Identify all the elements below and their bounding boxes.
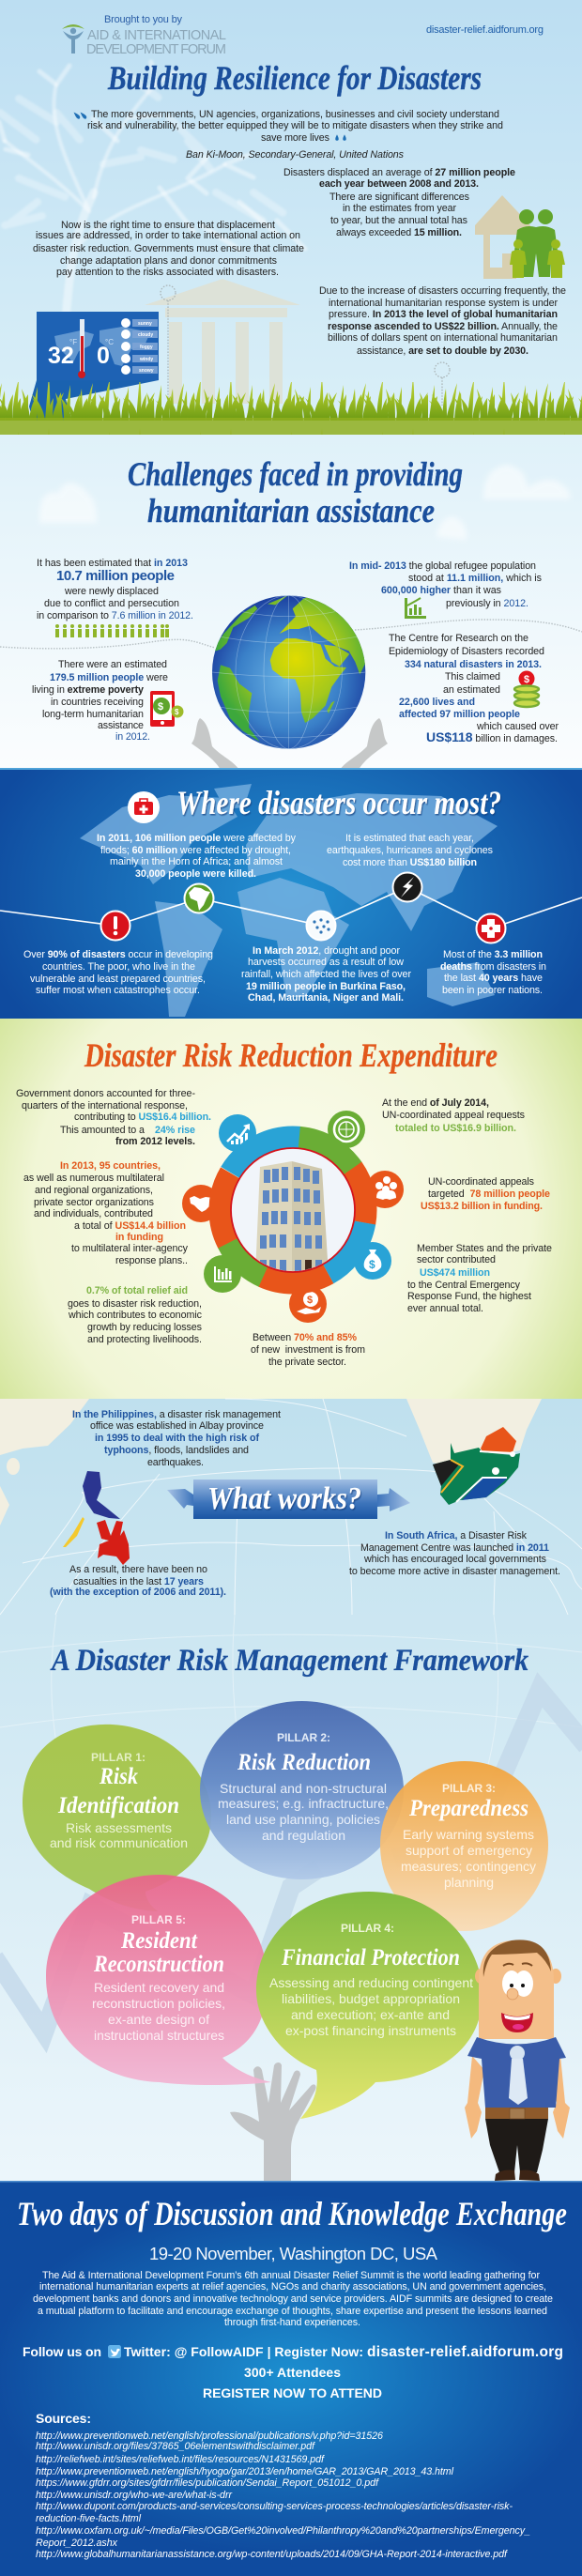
sources: http://www.globalhumanitarianassistance.org/wp-content/uploads/2014/09/GHA-Report-2014-interactive.pdf	[36, 2549, 508, 2560]
bubble: pillar 4: ex-post financing instruments	[285, 2023, 456, 2038]
text: member states: ever annual total.	[407, 1303, 483, 1314]
icon: twitter	[108, 2345, 121, 2358]
quote: Ban Ki-Moon, Secondary-General, United Nations	[186, 149, 405, 161]
description	[33, 2270, 553, 2328]
bubble: pillar 2: land use planning, policies	[226, 1812, 380, 1827]
text: extreme poverty: living in extreme poverty	[32, 684, 144, 696]
heading	[128, 455, 463, 529]
bubble: pillar 2: Structural and non-structural	[220, 1781, 387, 1796]
weather panel with thermometer: foggy	[140, 345, 153, 350]
text: 95 countries: in funding	[115, 1232, 163, 1243]
text: cost of earthquakes: cost more than US$180 billion	[343, 857, 477, 868]
logo: Aid & International Development Forum	[62, 24, 226, 57]
bubble: pillar 4: Assessing and reducing contingent	[269, 1975, 473, 1990]
panel: where disasters occur most	[0, 768, 582, 1019]
text: member states	[407, 1243, 552, 1314]
text: newly displaced	[37, 558, 193, 621]
text: developing countries: suffer most when catastrophes occur.	[36, 985, 200, 996]
text: extreme poverty: in 2012.	[115, 731, 150, 743]
text: appeal requests: totaled to US$16.9 billion.	[395, 1123, 516, 1134]
text: natural disasters: which caused over	[476, 721, 559, 732]
faint tree background	[0, 62, 305, 319]
sources: http://www.preventionweb.net/english/hyogo/gar/2013/en/home/GAR_2013/GAR_2013_43.html	[36, 2466, 454, 2477]
text: extreme poverty: assistance	[98, 720, 144, 731]
text: relief aid share: growth by reducing losses	[87, 1322, 202, 1333]
icon: Africa	[184, 884, 214, 912]
text: relief aid share: and protecting livelihoods.	[87, 1334, 202, 1345]
heading: Where disasters occur most?	[176, 784, 501, 821]
text: natural disasters: affected 97 million people	[399, 709, 520, 720]
text: Philippines result: (with the exception of 2006 and 2011).	[50, 1587, 226, 1598]
clouds	[39, 465, 570, 540]
text: relief aid share: goes to disaster risk reduction,	[68, 1298, 202, 1310]
text: Philippines: In the Philippines, a disaster risk management	[72, 1409, 281, 1420]
text: private sector investment	[251, 1332, 365, 1368]
bubble: pillar 3	[380, 1761, 548, 1931]
text: Philippines result	[50, 1564, 226, 1598]
text: deaths in poorer nations: the last 40 years have	[444, 973, 543, 984]
icon: money bag: $	[369, 1258, 375, 1271]
text: newly displaced: It has been estimated that in 2013	[37, 558, 188, 569]
bubble: pillar 4	[256, 1892, 482, 2119]
brought to you by: Brought to you by	[104, 14, 182, 25]
text: appeals targeted: UN-coordinated appeals	[428, 1176, 534, 1188]
bubble: pillar 5: PILLAR 5:	[131, 1913, 186, 1926]
text: displaced people: There are significant differences	[329, 192, 469, 203]
heading: Challenges faced in providing	[128, 455, 463, 493]
text: humanitarian response: international humanitarian response system is under	[329, 298, 558, 309]
icon: hand with dollar	[289, 1285, 327, 1323]
icon: Philippines map	[63, 1471, 130, 1565]
panel: two days of discussion	[0, 2181, 582, 2576]
text: natural disasters: an estimated	[443, 684, 500, 696]
text: government donors: Government donors accounted for three-	[16, 1088, 195, 1099]
text: right time: issues are addressed, in order to take international action on	[36, 230, 300, 241]
text: government donors: contributing to US$16.4 billion.	[74, 1112, 211, 1123]
text: refugee population: 600,000 higher than it was	[381, 585, 501, 596]
icon: hand with dollar: $	[307, 1295, 313, 1306]
dashed wave dividers	[0, 620, 582, 649]
icon: money bag	[354, 1242, 391, 1280]
sources	[36, 2411, 530, 2560]
icon: coin stack	[514, 670, 539, 707]
text: natural disasters: 334 natural disasters in 2013.	[405, 659, 542, 670]
text: floods and drought: In 2011, 106 million people were affected by	[97, 833, 297, 844]
icon: phone with dollar coins	[150, 691, 184, 727]
weather panel with thermometer: °C	[105, 338, 114, 346]
text: March 2012 drought: rainfall, which affected the lives of over	[241, 969, 411, 980]
bubble: pillar 3: support of emergency	[406, 1843, 532, 1858]
text: natural disasters: 22,600 lives and	[399, 697, 475, 708]
heading: humanitarian assistance	[147, 492, 435, 529]
text: Philippines: typhoons, floods, landslides and	[104, 1445, 249, 1456]
text: appeals targeted	[421, 1176, 550, 1212]
text: developing countries: countries. The poor, who live in the	[42, 961, 195, 973]
text: extreme poverty: 179.5 million people were	[50, 672, 168, 683]
text: displaced people	[283, 167, 515, 238]
weather panel with thermometer: sunny	[138, 321, 152, 327]
weather panel with thermometer: 0	[97, 343, 110, 369]
icon: South Africa flag map	[433, 1427, 520, 1505]
description: through first-hand experiences.	[224, 2317, 360, 2328]
sources: Report_2012.ashx	[36, 2538, 118, 2549]
bubble: pillar 5: Reconstruction	[93, 1952, 224, 1977]
sources: http://www.unisdr.org/who-we-are/what-is-drr	[36, 2490, 232, 2501]
text: 95 countries: response plans..	[115, 1255, 188, 1266]
bubble: pillar 4: PILLAR 4:	[341, 1922, 394, 1935]
bubble: pillar 1: and risk communication	[50, 1835, 188, 1850]
text: deaths in poorer nations: been in poorer nations.	[442, 985, 543, 996]
social and registration: Twitter: @ FollowAIDF | Register Now:	[124, 2344, 363, 2359]
text: government donors: 24% rise	[155, 1125, 195, 1136]
text: floods and drought: 30,000 people were killed.	[135, 868, 256, 880]
bubble: pillar 2: PILLAR 2:	[277, 1731, 330, 1744]
character: smiling man	[465, 1940, 570, 2181]
text: 95 countries: private sector organizations	[34, 1197, 154, 1208]
icon: handshake	[182, 1185, 220, 1222]
icon: rain drops	[306, 911, 336, 941]
text: South Africa: which has encouraged local governments	[363, 1554, 546, 1565]
text: March 2012 drought: Chad, Mauritania, Niger and Mali.	[248, 992, 404, 1004]
text: deaths in poorer nations: Most of the 3.3 million	[443, 949, 543, 960]
text: appeal requests	[382, 1097, 525, 1134]
text: floods and drought	[97, 833, 297, 880]
bubble: pillar 5: instructional structures	[94, 2028, 224, 2043]
text: relief aid share	[68, 1285, 203, 1345]
bubble: pillar 5: Resident	[120, 1928, 198, 1954]
text: natural disasters: US$118 billion in damages.	[426, 729, 558, 744]
text: Philippines	[72, 1409, 281, 1468]
bubble: pillar 3: measures; contingency	[401, 1859, 536, 1874]
text: right time: Now is the right time to ensure that displacement	[61, 220, 275, 231]
date and place: 19-20 November, Washington DC, USA	[149, 2244, 438, 2263]
weather panel with thermometer	[29, 312, 159, 421]
sources: reduction-five-facts.html	[36, 2513, 142, 2524]
text: displaced people: always exceeded 15 million.	[336, 227, 462, 238]
text: right time: change adaptation plans and donor commitments	[60, 255, 277, 267]
weather panel with thermometer: windy	[139, 357, 153, 362]
icon: hands holding globe	[191, 718, 388, 770]
text: newly displaced: in comparison to 7.6 million in 2012.	[37, 610, 193, 621]
text: newly displaced: were newly displaced	[64, 586, 159, 597]
bubble: pillar 3: PILLAR 3:	[442, 1782, 496, 1795]
icon: UN emblem	[328, 1111, 365, 1148]
description: international humanitarian experts at relief agencies, NGOs and charity associations, UN and government agencies,	[39, 2281, 546, 2292]
text: government donors	[16, 1088, 211, 1147]
bubble: pillar 4: and execution; ex-ante and	[291, 2007, 450, 2022]
text: right time: pay attention to the risks associated with disasters.	[56, 267, 279, 278]
text: cost of earthquakes: earthquakes, hurricanes and cyclones	[327, 845, 493, 856]
map background	[0, 1399, 582, 1784]
social and registration	[23, 2344, 563, 2400]
text: 95 countries: and regional organizations,	[35, 1185, 153, 1196]
text: government donors: This amounted to a	[60, 1125, 145, 1136]
sources: http://www.preventionweb.net/english/professional/publications/v.php?id=31526	[36, 2430, 383, 2442]
quote: risk and vulnerability, the better equipped they will be to mitigate disasters when they strike and	[87, 120, 503, 131]
timeline line	[0, 887, 582, 928]
bubble: pillar 1: Risk assessments	[66, 1820, 172, 1835]
text: 95 countries: a total of US$14.4 billion	[74, 1220, 186, 1232]
weather panel with thermometer: °F	[69, 338, 77, 346]
world map background	[80, 784, 498, 1017]
text: extreme poverty: in countries receiving	[51, 697, 144, 708]
text: right time	[33, 220, 304, 278]
text: humanitarian response: pressure. In 2013 the level of global humanitarian	[329, 309, 558, 320]
text: Philippines: office was established in Albay province	[90, 1420, 264, 1432]
text: deaths in poorer nations	[440, 949, 546, 996]
dashed balloon markers	[161, 285, 450, 406]
icon: first aid kit	[128, 791, 160, 823]
icon: pale government building	[145, 279, 300, 404]
text: newly displaced: due to conflict and persecution	[44, 598, 179, 609]
ring segments	[191, 1109, 394, 1311]
panel: lower background	[0, 1399, 582, 2181]
sources: https://www.gfdrr.org/sites/gfdrr/files/publication/Sendai_Report_051012_0.pdf	[36, 2477, 379, 2489]
text: developing countries: Over 90% of disasters occur in developing	[23, 949, 213, 960]
icon: medical cross	[477, 914, 505, 943]
icon: lightning	[392, 873, 422, 901]
text: Philippines: in 1995 to deal with the high risk of	[95, 1433, 259, 1444]
text: appeals targeted: targeted 78 million people	[428, 1188, 550, 1200]
bubble: pillar 1: Identification	[57, 1793, 179, 1818]
text: refugee population: In mid- 2013 the global refugee population	[349, 560, 536, 572]
text: South Africa	[349, 1530, 560, 1577]
bubble: pillar 4: liabilities, budget appropriation	[282, 1991, 460, 2006]
bubble: pillar 1	[23, 1725, 211, 1911]
bubble: pillar 1: PILLAR 1:	[91, 1751, 146, 1764]
text: refugee population	[349, 560, 542, 609]
text: extreme poverty	[32, 659, 168, 743]
weather panel with thermometer: 32	[48, 343, 74, 369]
text: private sector investment: Between 70% and 85%	[253, 1332, 357, 1343]
ring diagram	[182, 1109, 404, 1323]
text: government donors: from 2012 levels.	[115, 1136, 195, 1147]
text: humanitarian response	[319, 285, 566, 357]
heading: A Disaster Risk Management Framework	[50, 1644, 528, 1678]
text: humanitarian response: Due to the increase of disasters occurring frequently, the	[319, 285, 566, 297]
panel: building resilience introduction	[0, 0, 582, 441]
globe	[211, 593, 368, 749]
sources: http://www.unisdr.org/files/37865_06elementswithdisclaimer.pdf	[36, 2441, 315, 2452]
quote	[75, 109, 503, 161]
social and registration: 300+ Attendees	[244, 2365, 341, 2380]
grass	[0, 382, 582, 435]
text: 95 countries: as well as numerous multilateral	[23, 1173, 164, 1184]
bubble: pillar 2: measures; e.g. infractructure,	[218, 1796, 389, 1811]
text: South Africa: In South Africa, a Disaster Risk	[385, 1530, 528, 1541]
icon: warning	[101, 911, 130, 941]
description: development banks and donors and innovative technology and service providers. AIDF summits are designed to create	[33, 2293, 553, 2305]
quote: save more lives	[261, 132, 329, 144]
bubble: pillar 3: planning	[444, 1875, 494, 1890]
social and registration: Follow us on	[23, 2344, 101, 2359]
text: appeal requests: UN-coordinated appeal requests	[382, 1110, 525, 1121]
text: floods and drought: floods; 60 million were affected by drought,	[100, 845, 291, 856]
icon: rising chart	[219, 1114, 256, 1152]
text: displaced people: Disasters displaced an average of 27 million people	[283, 167, 515, 178]
text: private sector investment: of new investment is from	[251, 1344, 365, 1356]
icon: grey raised hand	[230, 2062, 316, 2181]
bubble: pillar 5: reconstruction policies,	[92, 1996, 225, 2011]
text: humanitarian response: assistance, are set to double by 2030.	[357, 345, 528, 357]
text: Philippines result: casualties in the last 17 years	[73, 1576, 204, 1587]
icon: row of people	[55, 624, 169, 637]
weather panel with thermometer: cloudy	[138, 332, 153, 338]
bubble: pillar 2	[200, 1701, 404, 1879]
bubble: pillar 1: Risk	[99, 1764, 138, 1789]
text: March 2012 drought: 19 million people in Burkina Faso,	[246, 981, 406, 992]
bubble: pillar 5	[46, 1875, 271, 2085]
social and registration: REGISTER NOW TO ATTEND	[203, 2385, 382, 2400]
text: relief aid share: 0.7% of total relief aid	[86, 1285, 188, 1296]
text: displaced people: in the estimates from year	[343, 203, 456, 214]
text: private sector investment: the private sector.	[268, 1357, 346, 1368]
bubble: pillar 3: Preparedness	[408, 1796, 528, 1821]
text: March 2012 drought: In March 2012, drought and poor	[253, 945, 400, 957]
text: displaced people: to year, but the annual total has	[330, 215, 467, 226]
quote: The more governments, UN agencies, organizations, businesses and civil society understand	[91, 109, 499, 120]
text: member states: Member States and the private	[417, 1243, 552, 1254]
text: displaced people: each year between 2008 and 2013.	[319, 178, 479, 190]
banner: what works	[167, 1480, 410, 1519]
text: 95 countries: and individuals, contributed	[34, 1208, 153, 1219]
text: right time: disaster risk reduction. Governments must ensure that climate	[33, 243, 304, 254]
text: natural disasters	[389, 633, 559, 744]
title: Building Resilience for Disasters	[107, 59, 482, 97]
bubble: pillar 5: Resident recovery and	[94, 1980, 224, 1995]
sources: http://www.dupont.com/products-and-services/consulting-services-process-technologies/articles/disaster-risk-	[36, 2501, 513, 2512]
sources: http://reliefweb.int/sites/reliefweb.int/files/resources/N1431569.pdf	[36, 2454, 325, 2465]
text: developing countries: vulnerable and least prepared countries,	[30, 974, 206, 985]
text: refugee population: previously in 2012.	[446, 598, 528, 609]
panel: disaster risk reduction expenditure	[0, 1019, 582, 1399]
sources: Sources:	[36, 2411, 91, 2426]
social and registration: disaster-relief.aidforum.org	[367, 2344, 563, 2360]
text: March 2012 drought	[241, 945, 411, 1004]
description: The Aid & International Development Forum’s 6th annual Disaster Relief Summit is the world leading gathering for	[42, 2270, 540, 2281]
text: extreme poverty: long-term humanitarian	[42, 709, 144, 720]
icon: phone with dollar coins: $	[175, 708, 179, 716]
text: 95 countries: to multilateral inter-agency	[71, 1243, 189, 1254]
weather panel with thermometer: snowy	[139, 368, 154, 374]
text: member states: sector contributed	[417, 1254, 496, 1265]
text: member states: Response Fund, the highest	[407, 1291, 531, 1302]
text: South Africa: Management Centre was launched in 2011	[360, 1542, 549, 1554]
website link: disaster-relief.aidforum.org	[426, 24, 544, 36]
bubble: pillar 2: Risk Reduction	[237, 1750, 371, 1775]
text: humanitarian response: billions of dollars spent on international humanitarian	[328, 332, 558, 344]
text: member states: to the Central Emergency	[407, 1280, 521, 1291]
text: cost of earthquakes	[327, 833, 493, 868]
text: natural disasters: Epidemiology of Disasters recorded	[389, 646, 544, 657]
text: extreme poverty: There were an estimated	[58, 659, 167, 670]
icon: bar chart	[204, 1255, 241, 1293]
logo: Aid & International Development Forum: AID & INTERNATIONAL	[87, 28, 226, 43]
text: South Africa: to become more active in disaster management.	[349, 1566, 560, 1577]
bubble: pillar 5: ex-ante design of	[108, 2012, 209, 2027]
icon: phone with dollar coins: $	[158, 701, 163, 713]
banner: what works: What works?	[207, 1481, 361, 1516]
text: member states: US$474 million	[420, 1267, 490, 1279]
text: newly displaced: 10.7 million people	[56, 568, 175, 584]
text: appeal requests: At the end of July 2014,	[382, 1097, 489, 1109]
text: humanitarian response: response ascended to US$22 billion. Annually, the	[328, 321, 558, 332]
text: floods and drought: mainly in the Horn of Africa; and almost	[110, 856, 283, 867]
icon: group of people	[366, 1171, 404, 1208]
bubble: pillar 4: Financial Protection	[281, 1945, 460, 1970]
text: 95 countries	[23, 1160, 189, 1266]
text: natural disasters: This claimed	[445, 671, 500, 682]
pale chart line behind bubbles	[0, 1690, 582, 2032]
text: Philippines result: As a result, there have been no	[69, 1564, 207, 1575]
icon: house and family	[475, 195, 565, 279]
text: 95 countries: In 2013, 95 countries,	[60, 1160, 161, 1172]
text: natural disasters: The Centre for Research on the	[389, 633, 528, 644]
panel: challenges in humanitarian assistance	[0, 435, 582, 770]
logo: Aid & International Development Forum: DEVELOPMENT FORUM	[86, 42, 226, 57]
bubble: pillar 2: and regulation	[262, 1828, 345, 1843]
sources: http://www.oxfam.org.uk/~/media/Files/OGB/Get%20involved/Philanthropy%20and%20partnerships/Emergency_	[36, 2525, 530, 2537]
centre circle with building	[231, 1148, 355, 1275]
icon: coin stack: $	[524, 674, 529, 685]
text: government donors: quarters of the international response,	[22, 1100, 188, 1112]
text: March 2012 drought: harvests occurred as a result of low	[248, 957, 404, 968]
text: cost of earthquakes: It is estimated that each year,	[345, 833, 474, 844]
icon: rising bar chart	[405, 598, 426, 619]
text: deaths in poorer nations: deaths from disasters in	[440, 961, 546, 973]
text: relief aid share: which contributes to economic	[68, 1310, 203, 1321]
text: refugee population: stood at 11.1 million, which is	[408, 573, 542, 584]
text: appeals targeted: US$13.2 billion in funding.	[421, 1201, 543, 1212]
bubble: pillar 3: Early warning systems	[403, 1827, 534, 1842]
text: developing countries	[23, 949, 213, 996]
text: Philippines: earthquakes.	[147, 1457, 204, 1468]
description: a mutual platform to facilitate and encourage exchange of thoughts, share expertise and present the lessons learned	[38, 2306, 547, 2317]
